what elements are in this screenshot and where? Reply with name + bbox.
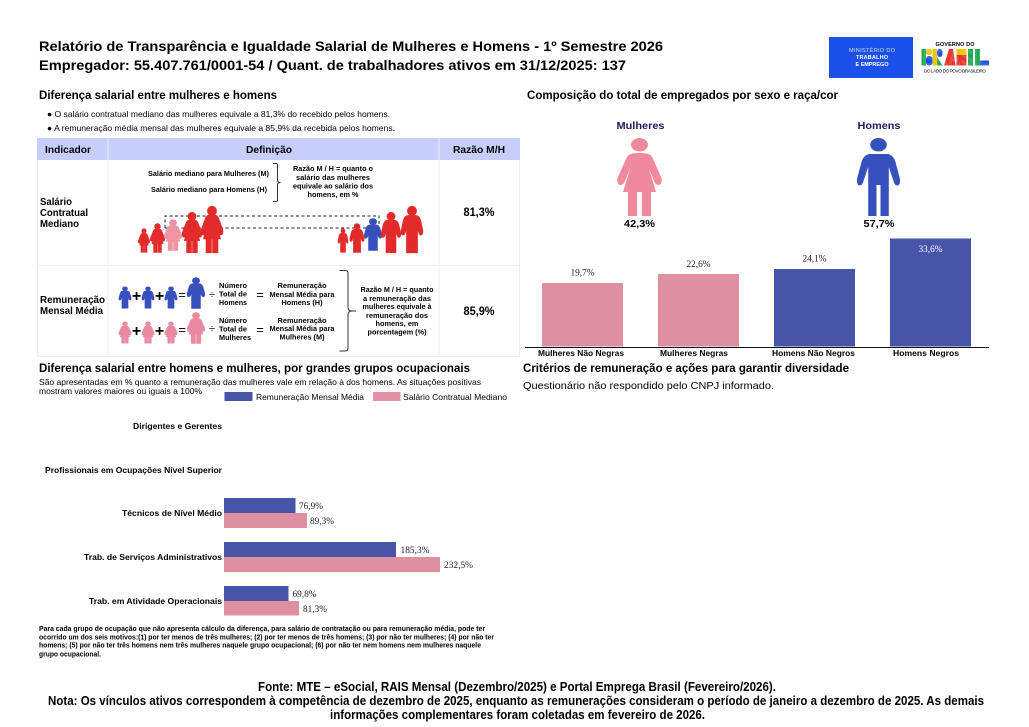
legend: Salário Contratual Mediano bbox=[403, 392, 507, 402]
bars: trab. em atividade operacionais: 69,8% bbox=[292, 589, 317, 599]
value: 85,9%: 85,9% bbox=[464, 306, 494, 318]
bar chart: grupos ocupacionais bbox=[45, 421, 474, 616]
row label: remuneração mensal média: Mensal Média bbox=[40, 306, 103, 317]
logo: governo do brasil bbox=[922, 42, 989, 74]
table: indicador, definição, razão bbox=[37, 138, 520, 357]
title: Relatório de Transparência e Igualdade Salarial de Mulheres e Homens - 1º Semestre 2026 bbox=[39, 38, 663, 54]
bars: trab. de serviços administrativos: 185,3% bbox=[400, 545, 430, 555]
equation: mulheres: Mulheres (M) bbox=[280, 334, 324, 342]
bar: homens negros: Homens Negros bbox=[893, 348, 959, 358]
pictogram: homens: 57,7% bbox=[864, 218, 895, 230]
text block: nota sobre motivos: homens; (5) por não ter três homens nem três mulheres naquele grupo ocupacional; (6) por não ter nem homens nem mulheres naquele bbox=[39, 642, 481, 650]
text block: bullets: ● A remuneração média mensal das mulheres equivale a 85,9% da recebida pelos homens. bbox=[47, 123, 395, 133]
row label: salário contratual mediano: Contratual bbox=[40, 208, 88, 219]
row label: salário contratual mediano bbox=[40, 197, 88, 230]
equation: homens: = bbox=[178, 287, 186, 302]
bracket and ratio definition: remuneração dos bbox=[366, 313, 428, 320]
panel: diferença salarial por grupos ocupacionais bbox=[39, 361, 507, 658]
equation: mulheres: + bbox=[155, 323, 164, 340]
equation: homens: Homens (H) bbox=[282, 300, 322, 307]
definition: salário mediano: equivale ao salário dos bbox=[293, 184, 373, 190]
logo: governo do brasil: BRASIL bbox=[922, 46, 989, 70]
equation: mulheres: Número bbox=[219, 318, 247, 325]
definition: salário mediano: homens, em % bbox=[308, 192, 359, 199]
equation: homens: ÷ bbox=[209, 289, 215, 301]
bars: trab. em atividade operacionais: Trab. em Atividade Operacionais bbox=[89, 596, 222, 606]
bars: técnicos de nível médio bbox=[122, 498, 335, 528]
bracket and ratio definition: porcentagem (%) bbox=[368, 330, 426, 336]
bar chart: sexo e raça/cor bbox=[525, 238, 989, 358]
bars: técnicos de nível médio: Técnicos de Nível Médio bbox=[122, 508, 222, 518]
definition: salário mediano: salário das mulheres bbox=[296, 175, 370, 182]
bars: trab. em atividade operacionais: 81,3% bbox=[303, 604, 328, 614]
equation: homens: Remuneração bbox=[278, 283, 326, 290]
bar: homens não negros: Homens Não Negros bbox=[772, 348, 855, 358]
equation: homens: Número bbox=[219, 283, 247, 290]
equation: homens: Mensal Média para bbox=[270, 292, 335, 299]
bar: homens negros: 33,6% bbox=[918, 244, 943, 254]
panel: diferença salarial entre mulheres e homens bbox=[37, 88, 520, 357]
table header bbox=[45, 144, 505, 156]
equation: mulheres: Mulheres bbox=[219, 335, 251, 342]
title: Empregador: 55.407.761/0001-54 / Quant. de trabalhadores ativos em 31/12/2025: 137 bbox=[39, 57, 626, 73]
logo: governo do brasil: DO LADO DO POVO BRASILEIRO bbox=[924, 68, 986, 74]
bars: técnicos de nível médio: 76,9% bbox=[299, 501, 324, 511]
definition: salário mediano bbox=[148, 164, 373, 202]
equation: mulheres: = bbox=[178, 322, 186, 337]
panel: composição do total de empregados bbox=[525, 88, 989, 358]
bar: homens negros bbox=[890, 238, 971, 358]
heading: diferença salarial: Diferença salarial entre mulheres e homens bbox=[39, 88, 277, 102]
bar: mulheres negras bbox=[658, 259, 739, 358]
logo: ministério do trabalho e emprego: MINISTÉRIO DO bbox=[849, 47, 896, 54]
bar: mulheres negras: Mulheres Negras bbox=[660, 348, 728, 358]
footer: fonte e nota: Fonte: MTE – eSocial, RAIS Mensal (Dezembro/2025) e Portal Emprega Brasil (Fevereiro/2026). bbox=[258, 679, 776, 694]
logo: ministério do trabalho e emprego bbox=[829, 37, 913, 78]
definition: salário mediano: Salário mediano para Mulheres (M) bbox=[148, 171, 269, 178]
bracket and ratio definition: Razão M / H = quanto bbox=[360, 287, 434, 294]
table header: Razão M/H bbox=[453, 144, 505, 156]
text block: nota sobre motivos: Para cada grupo de ocupação que não apresenta cálculo da diferença, para salário de contratação ou para remuneração média, pode ter bbox=[39, 626, 485, 633]
footer: fonte e nota: informações complementares foram coletadas em fevereiro de 2026. bbox=[330, 707, 705, 722]
heading: composição: Composição do total de empregados por sexo e raça/cor bbox=[527, 88, 838, 102]
equation: mulheres: Mensal Média para bbox=[270, 326, 335, 333]
footer: fonte e nota bbox=[48, 679, 984, 722]
title bbox=[39, 38, 663, 73]
equation: homens: Total de bbox=[219, 292, 247, 298]
equation: mulheres bbox=[119, 313, 335, 343]
definition: salário mediano: Razão M / H = quanto o bbox=[293, 166, 373, 173]
panel: critérios de remuneração: Critérios de remuneração e ações para garantir diversidade bbox=[523, 361, 849, 375]
equation: mulheres: Remuneração bbox=[278, 318, 326, 325]
pictogram: mulheres bbox=[616, 120, 665, 230]
text block: bullets: ● O salário contratual mediano das mulheres equivale a 81,3% do recebido pelos homens. bbox=[47, 109, 390, 119]
bracket and ratio definition bbox=[340, 270, 434, 351]
logo: ministério do trabalho e emprego: E EMPREGO bbox=[856, 62, 889, 68]
bars: técnicos de nível médio: 89,3% bbox=[310, 516, 335, 526]
equation: mulheres: = bbox=[256, 322, 264, 337]
panel: critérios de remuneração: Questionário não respondido pelo CNPJ informado. bbox=[523, 380, 774, 392]
row label: remuneração mensal média: Remuneração bbox=[40, 295, 105, 306]
equation: mulheres: Total de bbox=[219, 326, 247, 334]
bars: trab. em atividade operacionais bbox=[89, 586, 328, 616]
bars: trab. de serviços administrativos: Trab. de Serviços Administrativos bbox=[84, 552, 222, 562]
equation: mulheres: ÷ bbox=[209, 323, 215, 335]
bar: mulheres não negras bbox=[538, 268, 624, 358]
logo: governo do brasil: GOVERNO DO bbox=[936, 42, 975, 48]
bar: mulheres não negras: 19,7% bbox=[570, 268, 595, 278]
category: profissionais: Profissionais em Ocupações Nível Superior bbox=[45, 465, 223, 475]
bars: trab. de serviços administrativos: 232,5% bbox=[444, 560, 474, 570]
bracket and ratio definition: homens, em bbox=[376, 321, 418, 328]
equation: homens: + bbox=[132, 288, 141, 305]
bar: homens não negros bbox=[772, 254, 855, 358]
pictogram: homens: Homens bbox=[858, 120, 901, 132]
text block: explicação bbox=[39, 377, 481, 396]
heading: grupos ocupacionais: Diferença salarial entre homens e mulheres, por grandes grupos ocupacionais bbox=[39, 361, 470, 375]
bars: trab. de serviços administrativos bbox=[84, 542, 474, 572]
pictogram: homens bbox=[857, 120, 901, 230]
table header: Definição bbox=[246, 144, 292, 156]
value: 81,3%: 81,3% bbox=[464, 207, 494, 219]
equation: mulheres: + bbox=[132, 323, 141, 340]
bar: homens não negros: 24,1% bbox=[802, 254, 827, 264]
equation: homens: = bbox=[256, 287, 264, 302]
pictogram: mulheres: Mulheres bbox=[616, 120, 665, 132]
text block: nota sobre motivos: ocorrido um dos seis motivos:(1) por ter menos de três mulheres; (2) por ter menos de três homens; (3) por não ter mulheres; (4) por não ter bbox=[39, 634, 494, 642]
category: dirigentes e gerentes: Dirigentes e Gerentes bbox=[133, 421, 222, 431]
table header: Indicador bbox=[45, 144, 91, 156]
row label: remuneração mensal média bbox=[40, 295, 105, 317]
text block: bullets bbox=[47, 109, 395, 133]
equation: homens: Homens bbox=[219, 300, 247, 307]
pictogram: mulheres: 42,3% bbox=[624, 218, 656, 230]
text block: nota sobre motivos bbox=[39, 626, 494, 658]
text block: explicação: São apresentadas em % quanto a remuneração das mulheres vale em relação à dos homens. As situações positivas bbox=[39, 377, 481, 387]
bar: mulheres negras: 22,6% bbox=[686, 259, 711, 269]
legend bbox=[224, 392, 507, 402]
equation: homens bbox=[119, 278, 335, 308]
legend: Remuneração Mensal Média bbox=[256, 392, 364, 402]
logo: ministério do trabalho e emprego: TRABALHO bbox=[856, 55, 889, 61]
bar: mulheres não negras: Mulheres Não Negras bbox=[538, 348, 624, 358]
panel: critérios de remuneração bbox=[523, 361, 849, 392]
bracket and ratio definition: mulheres equivale à bbox=[362, 304, 432, 311]
row label: salário contratual mediano: Salário bbox=[40, 197, 72, 208]
diagram: figures ranked by salary bbox=[139, 207, 422, 252]
row label: salário contratual mediano: Mediano bbox=[40, 219, 79, 230]
text block: nota sobre motivos: grupo ocupacional. bbox=[39, 652, 101, 658]
equation: homens: + bbox=[155, 288, 164, 305]
text block: explicação: mostram valores maiores ou iguais a 100% bbox=[39, 386, 202, 396]
bracket and ratio definition: a remuneração das bbox=[363, 296, 431, 303]
definition: salário mediano: Salário mediano para Homens (H) bbox=[151, 187, 267, 194]
